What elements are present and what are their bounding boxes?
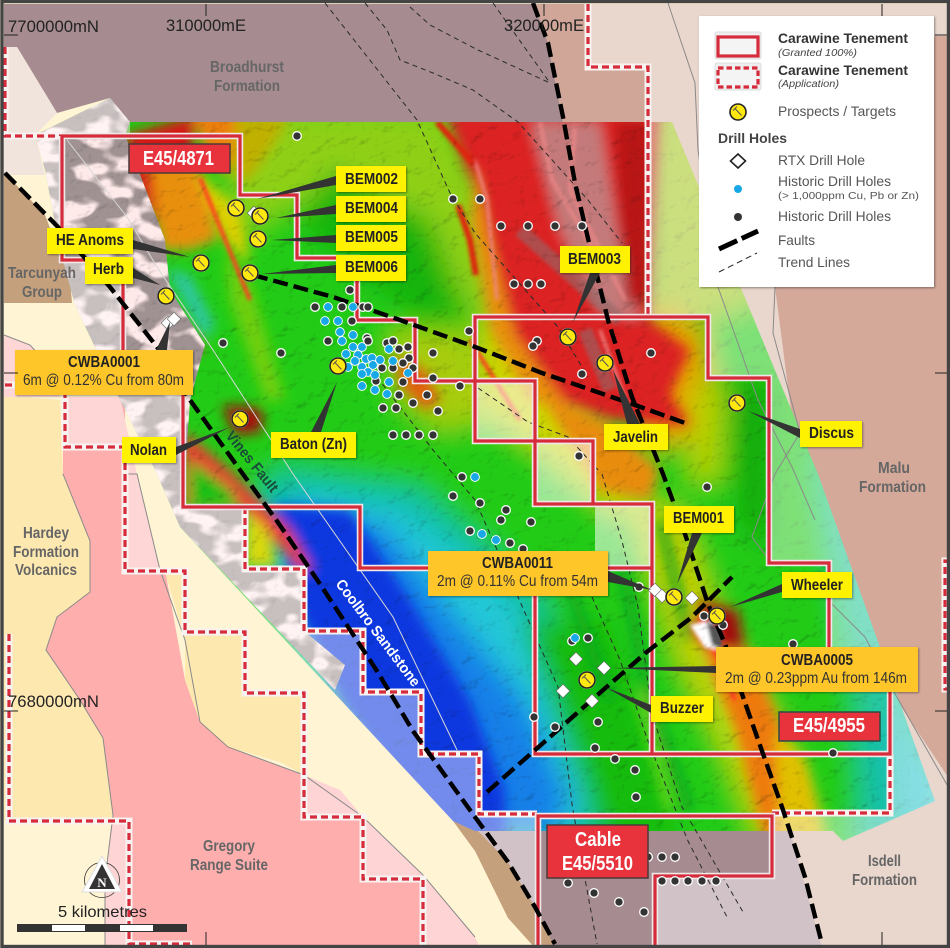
tenement label: E45/4871: E45/4871 [143, 148, 214, 170]
formation label: Malu Formation: Malu [878, 460, 910, 477]
label: Buzzer [651, 696, 713, 722]
formation label: Hardey Formation Volcanics: Hardey [23, 525, 69, 542]
label: BEM001: BEM001 [673, 510, 724, 527]
faded window B [537, 443, 593, 504]
trend lines [325, 3, 743, 944]
geology: pink unit north west [4, 335, 60, 397]
prospect: BEM003 [559, 328, 577, 346]
grid label: 7680000mN: 7680000mN [8, 692, 99, 711]
prospect: Discus [728, 394, 746, 412]
formation label: Tarcunyah Group: Group [22, 284, 62, 301]
label: Wheeler: Wheeler [791, 577, 843, 594]
label: Javelin [604, 424, 668, 450]
geology: dark unit in Cable tenement [538, 831, 772, 948]
geology: Broadhurst Formation [4, 4, 563, 122]
prospect: HE Anoms [192, 254, 210, 272]
formation label: Isdell Formation [852, 853, 917, 889]
geology: light pink margin north [63, 397, 160, 571]
formation label: Gregory Range Suite: Gregory [203, 838, 255, 855]
geology: Hardey Formation west [4, 395, 113, 821]
label: BEM003 [560, 246, 630, 273]
geology: Tarcunyah Group [4, 172, 72, 303]
geology: Hardey Formation centre [166, 575, 304, 775]
label: BEM005: BEM005 [345, 229, 398, 246]
geology: Isdell light pink formation [588, 4, 950, 948]
prospect: Herb [157, 287, 175, 305]
callout: CWBA0011 [428, 551, 608, 596]
tenement label: Cable E45/5510 [547, 825, 648, 878]
faded window A [477, 380, 535, 440]
legend text: prospects: Prospects / Targets [778, 103, 896, 119]
label: Herb: Herb [93, 261, 124, 278]
legend text: application: Carawine Tenement [778, 62, 908, 78]
feature label: Vines Fault: Vines Fault [222, 428, 282, 496]
label: BEM006: BEM006 [345, 259, 398, 276]
formation label: Broadhurst Formation: Formation [214, 78, 280, 95]
geology: brown unit beside fault [535, 4, 648, 122]
legend text: application: (Application) [778, 78, 839, 90]
pointer wedges [133, 176, 800, 713]
geology: Gregory Range Suite [46, 397, 423, 948]
prospect: BEM004 [251, 207, 269, 225]
legend text: historic blue: (> 1,000ppm Cu, Pb or Zn) [778, 190, 919, 202]
legend text: RTX: RTX Drill Hole [778, 152, 865, 168]
formation label: Isdell Formation: Isdell [868, 853, 901, 870]
legend heading: drill holes: Drill Holes [718, 130, 787, 146]
formation label: Gregory Range Suite: Range Suite [190, 857, 268, 874]
formation label: Broadhurst Formation: Broadhurst [210, 59, 285, 76]
grid label: 320000mE: 320000mE [504, 16, 584, 35]
geology: pale north west [4, 47, 57, 175]
legend text: granted [778, 30, 908, 59]
legend text: application [778, 62, 908, 90]
tenement label: E45/4871 [129, 144, 230, 173]
legend icon: blue dot [734, 185, 742, 193]
legend icon: trend line [719, 253, 757, 272]
label: Nolan [122, 437, 176, 463]
formation label: Isdell Formation: Formation [852, 872, 917, 889]
prospect: Buzzer [578, 671, 596, 689]
geology: brown strip beside fault [453, 821, 555, 948]
legend text: granted: Carawine Tenement [778, 30, 908, 46]
label: Javelin: Javelin [613, 429, 658, 446]
legend icon: fault [719, 231, 758, 249]
feature label: Coolbro Sandstone: Coolbro Sandstone [332, 576, 424, 690]
callout: CWBA0005 [716, 647, 918, 692]
callout: CWBA0011: CWBA0011 [482, 555, 553, 572]
label: BEM006 [336, 255, 406, 281]
prospect: BEM005 [249, 230, 267, 248]
formation label: Hardey Formation Volcanics [13, 525, 79, 579]
legend text: trend lines: Trend Lines [778, 254, 850, 270]
label: BEM004 [336, 196, 406, 222]
label: BEM002: BEM002 [345, 171, 398, 188]
legend swatch: granted tenement [715, 32, 761, 59]
label: Wheeler [782, 572, 852, 598]
grid label: 7700000mN: 7700000mN [8, 17, 99, 36]
tenement label: Cable E45/5510: Cable [575, 829, 621, 851]
geology: lilac unit south [478, 831, 822, 948]
prospect: Wheeler [708, 607, 726, 625]
legend panel [699, 16, 934, 287]
tenement label: E45/4955 [779, 712, 880, 741]
geology: Malu Formation [775, 36, 950, 780]
label: Herb [85, 257, 133, 284]
formation label: Hardey Formation Volcanics: Volcanics [15, 562, 77, 579]
callout: CWBA0005: 2m @ 0.23ppm Au from 146m [725, 670, 907, 687]
north arrow: N [97, 875, 107, 890]
legend icon: RTX diamond [730, 154, 746, 168]
scale bar [17, 924, 187, 932]
prospect: BEM006 [241, 264, 259, 282]
legend text: historic blue [778, 173, 919, 202]
legend icon: black dot [734, 213, 742, 221]
legend text: historic black: Historic Drill Holes [778, 208, 891, 224]
label: BEM003: BEM003 [568, 251, 621, 268]
prospect: Javelin [596, 354, 614, 372]
label: Discus [800, 421, 862, 447]
label: HE Anoms: HE Anoms [56, 232, 124, 249]
granted tenement boundaries (solid) [62, 136, 890, 948]
label: Baton (Zn): Baton (Zn) [280, 436, 347, 453]
callout: CWBA0001: 6m @ 0.12% Cu from 80m [23, 372, 184, 389]
historic drill holes (blue) [321, 303, 579, 642]
prospect: BEM002 [227, 199, 245, 217]
label: HE Anoms [47, 228, 133, 254]
label: BEM004: BEM004 [345, 200, 398, 217]
callout: CWBA0011: 2m @ 0.11% Cu from 54m [437, 573, 598, 590]
tenement label: Cable E45/5510: E45/5510 [562, 853, 633, 875]
tenement label: E45/4955: E45/4955 [793, 715, 865, 737]
prospect: Nolan [231, 410, 249, 428]
label: Buzzer: Buzzer [660, 700, 704, 717]
prospect: BEM001 [665, 588, 683, 606]
label: Discus: Discus [809, 425, 854, 442]
label: BEM001 [664, 506, 734, 533]
prospect: Baton [329, 357, 347, 375]
geology: light pink margin east [304, 775, 480, 948]
faded window C [595, 506, 652, 568]
label: Nolan: Nolan [130, 442, 167, 459]
callout: CWBA0001 [15, 350, 193, 395]
label: Baton (Zn) [271, 432, 356, 458]
legend text: granted: (Granted 100%) [778, 47, 857, 59]
north arrow [82, 856, 122, 898]
formation label: Malu Formation [859, 460, 926, 496]
formation label: Malu Formation: Formation [859, 479, 926, 496]
RTX drill holes [161, 206, 699, 708]
geology: light pink margin south west [105, 821, 130, 948]
callout: CWBA0001: CWBA0001 [68, 354, 140, 371]
label: BEM005 [336, 225, 406, 251]
formation label: Tarcunyah Group: Tarcunyah [8, 265, 76, 282]
callout: CWBA0005: CWBA0005 [781, 652, 853, 669]
historic drill holes (black) [219, 132, 837, 916]
formation label: Hardey Formation Volcanics: Formation [13, 544, 79, 561]
legend swatch: application tenement [715, 63, 761, 90]
magnetic image [36, 98, 935, 841]
legend text: faults: Faults [778, 232, 815, 248]
formation label: Gregory Range Suite [190, 838, 268, 874]
formation label: Broadhurst Formation [210, 59, 285, 95]
formation label: Tarcunyah Group [8, 265, 76, 301]
legend text: historic blue: Historic Drill Holes [778, 173, 891, 189]
legend icon: prospect [729, 103, 747, 121]
scale label: 5 kilometres [58, 904, 147, 921]
label: BEM002 [336, 166, 406, 192]
grid label: 310000mE: 310000mE [166, 16, 246, 35]
